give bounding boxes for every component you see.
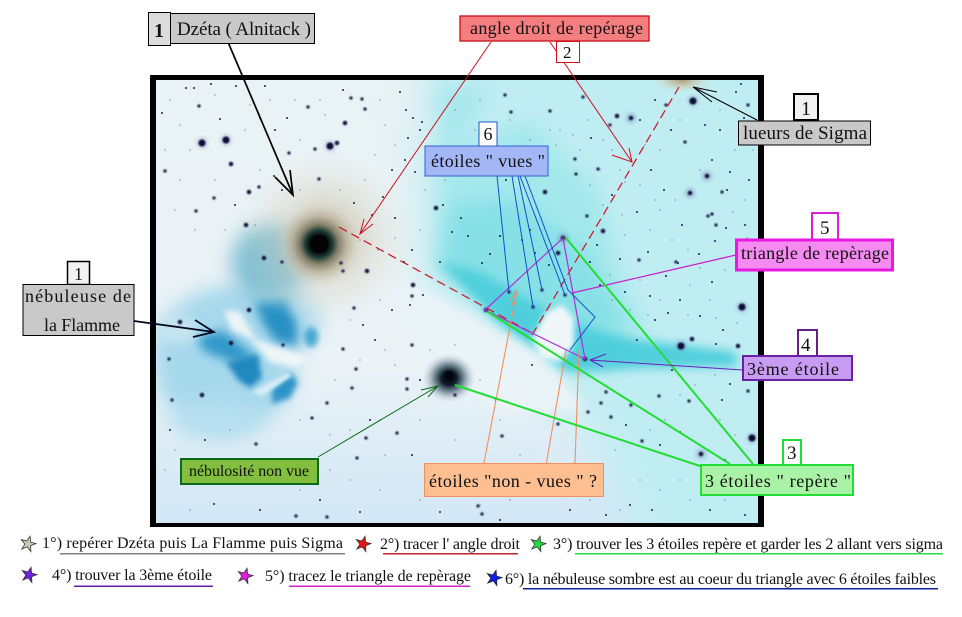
label: angle droit [460, 16, 649, 62]
legend: step 4 [20, 565, 213, 587]
label: Dzéta: 1 [154, 20, 164, 42]
label: étoiles non-vues: étoiles "non - vues " ? [429, 471, 597, 491]
label: nébulosité non vue: nébulosité non vue [189, 463, 309, 480]
label: étoiles non-vues [424, 464, 604, 496]
label: Dzéta [148, 12, 314, 46]
label: triangle de repèrage [736, 213, 892, 270]
legend: step 4: 4°) trouver la 3ème étoile [52, 567, 212, 584]
red right-angle lines [339, 42, 679, 335]
label: angle droit: angle droit de repérage [470, 18, 643, 38]
label: étoiles vues: 6 [484, 124, 492, 144]
label: nébuleuse de la Flamme [23, 262, 134, 336]
panel: star field photograph [150, 75, 764, 527]
label: 3ème étoile: 4 [801, 335, 811, 356]
label: nébuleuse de la Flamme: nébuleuse de [25, 286, 131, 306]
label: Dzéta: Dzéta ( Alnitack ) [177, 19, 311, 40]
black arrow to Flame [134, 320, 214, 337]
small stars [165, 95, 748, 517]
star halos [202, 101, 752, 454]
bright stars [202, 101, 752, 438]
Zeta star and halo [218, 169, 394, 316]
legend: step 2: 2°) tracer l' angle droit [380, 536, 521, 553]
label: lueurs de Sigma [738, 94, 870, 145]
dark green arrow [318, 386, 438, 457]
label: angle droit: 2 [563, 43, 572, 62]
label: étoiles vues: étoiles " vues " [431, 151, 545, 171]
label: lueurs de Sigma: lueurs de Sigma [743, 123, 868, 144]
label: nébuleuse de la Flamme: 1 [74, 264, 83, 284]
legend: step 1: 1°) repérer Dzéta puis La Flamme puis Sigma [42, 535, 343, 552]
legend: step 5: 5°) tracez le triangle de repèrage [265, 568, 471, 585]
unseen nebulosity star [424, 356, 474, 400]
black arrow to Zeta [228, 42, 293, 195]
label: 3 étoiles repère [701, 440, 853, 495]
black arrow to Sigma [693, 87, 757, 120]
label: 3ème étoile: 3ème étoile [747, 359, 839, 379]
label: triangle de repèrage: triangle de repèrage [741, 243, 889, 263]
label: étoiles vues [425, 122, 548, 176]
legend: step 3: 3°) trouver les 3 étoiles repère et garder les 2 allant vers sigma [553, 536, 943, 553]
label: 3ème étoile [743, 330, 852, 380]
magenta triangle [485, 238, 736, 359]
glow of Sigma [656, 80, 708, 92]
medium stars [180, 116, 738, 454]
legend: step 6: 6°) la nébuleuse sombre est au coeur du triangle avec 6 étoiles faibles [505, 571, 936, 588]
label: 3 étoiles repère: 3 [787, 443, 796, 464]
blue lines to six faint stars [497, 176, 595, 350]
tiny stars [165, 90, 753, 510]
Flame nebula [153, 286, 320, 438]
label: lueurs de Sigma: 1 [801, 98, 811, 120]
purple arrow to third star [590, 354, 743, 370]
label: nébulosité non vue [181, 459, 318, 484]
label: 3 étoiles repère: 3 étoiles " repère " [705, 471, 851, 491]
faint stars [162, 84, 752, 520]
orange lines to unseen stars [483, 290, 579, 468]
green lines to three guide stars [455, 238, 753, 466]
label: nébuleuse de la Flamme: la Flamme [44, 315, 120, 335]
cyan nebula background [402, 80, 758, 523]
label: triangle de repèrage: 5 [820, 218, 830, 239]
